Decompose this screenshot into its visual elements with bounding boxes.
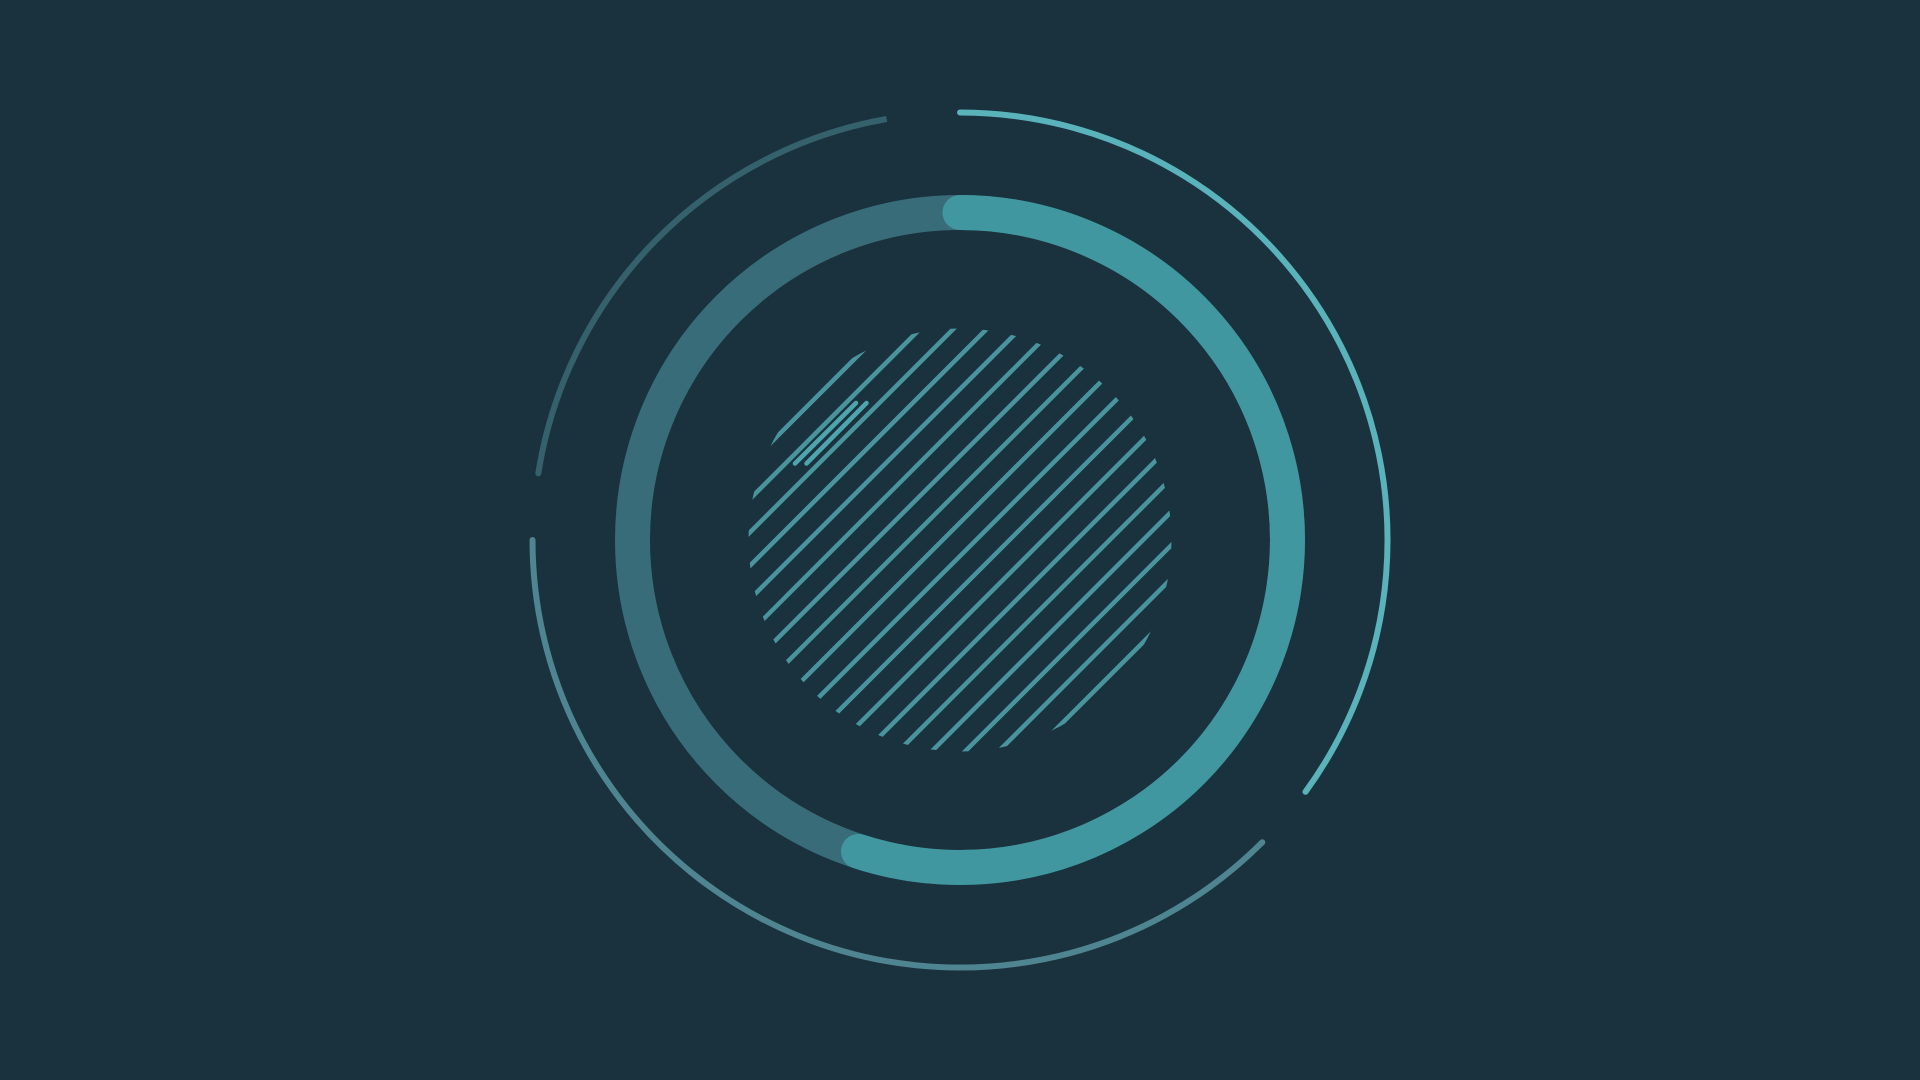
progress ring value arc (858, 212, 1287, 868)
progress ring track (632, 212, 1288, 868)
outer arc: dim upper-left segment (535, 119, 887, 476)
outer arc: bright right segment (960, 112, 1388, 792)
hatched centre disc (748, 328, 1172, 752)
concentric ring graphic (530, 110, 1390, 970)
short accent strokes (795, 403, 866, 464)
outer arc: mid bottom segment (532, 540, 1262, 968)
